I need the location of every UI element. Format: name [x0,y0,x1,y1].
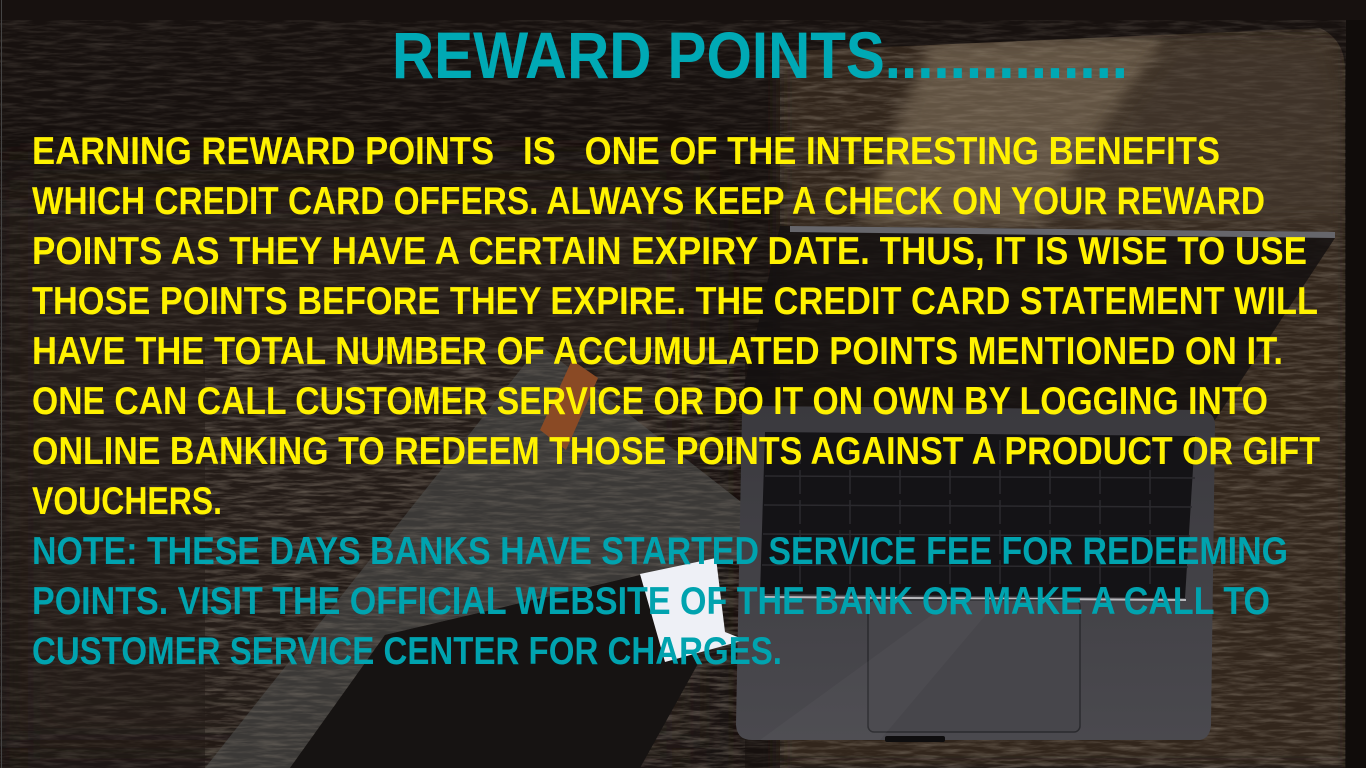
leather tab [540,360,598,450]
body paragraph: EARNING REWARD POINTS IS ONE OF THE INTERESTING BENEFITS [32,130,1220,173]
title: REWARD POINTS............... [392,18,1128,92]
laptop screen edge [740,226,1335,420]
white card [640,558,745,662]
note paragraph [32,530,1288,673]
keyboard rows [762,440,1195,590]
felt sleeve [205,345,745,768]
laptop [736,406,1215,742]
trackpad [868,600,1080,732]
body paragraph [32,130,1320,523]
body paragraph: VOUCHERS. [32,480,222,523]
note paragraph: CUSTOMER SERVICE CENTER FOR CHARGES. [32,630,782,673]
